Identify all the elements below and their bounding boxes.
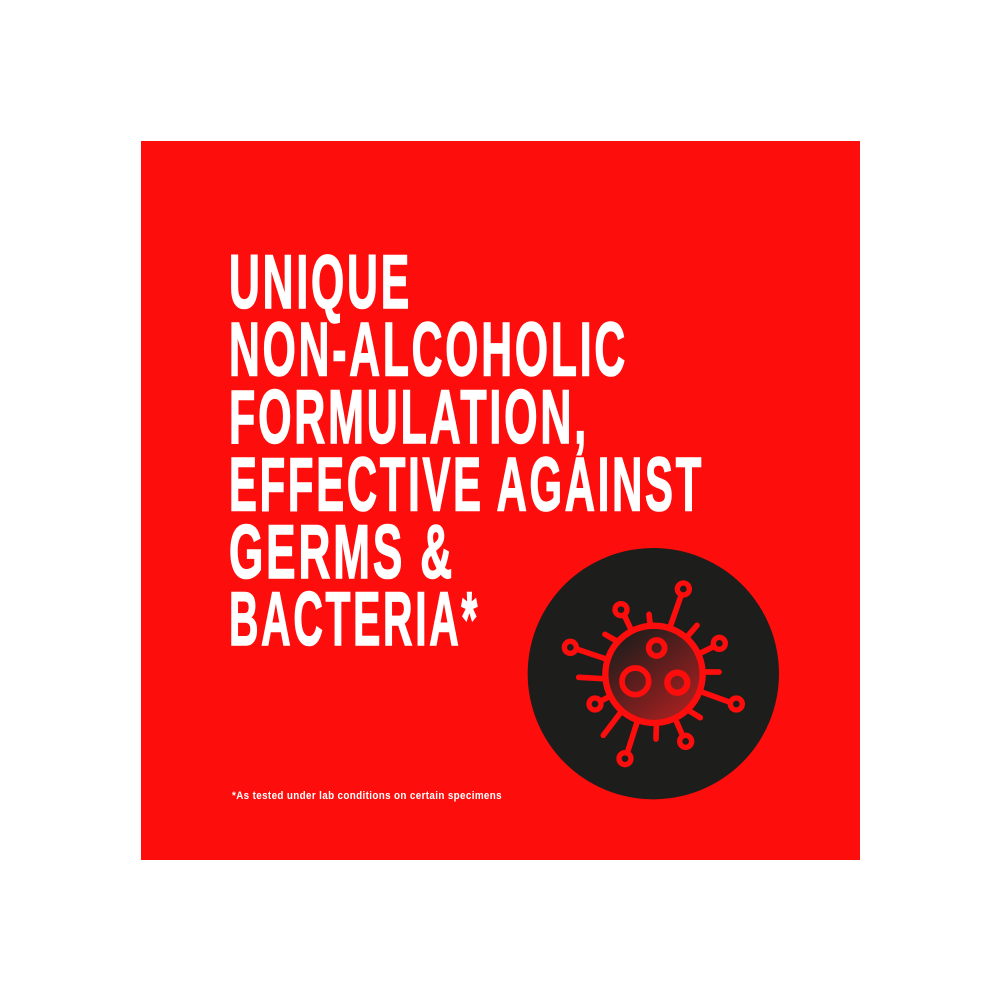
- spike tips: [564, 583, 742, 765]
- heading: [229, 240, 704, 662]
- heading: FORMULATION,: [229, 375, 589, 460]
- virus body: [605, 626, 703, 723]
- icon: virus in dark circle: [528, 548, 779, 799]
- dark circle: [528, 548, 779, 799]
- virus spikes: [577, 597, 729, 752]
- panel: red background: [141, 141, 860, 860]
- heading: BACTERIA*: [229, 577, 480, 662]
- heading: NON-ALCOHOLIC: [229, 308, 628, 392]
- heading: UNIQUE: [229, 240, 412, 325]
- virus inner circles: [622, 640, 687, 695]
- heading: GERMS &: [229, 510, 455, 595]
- footnote: *As tested under lab conditions on certain specimens: [232, 790, 502, 802]
